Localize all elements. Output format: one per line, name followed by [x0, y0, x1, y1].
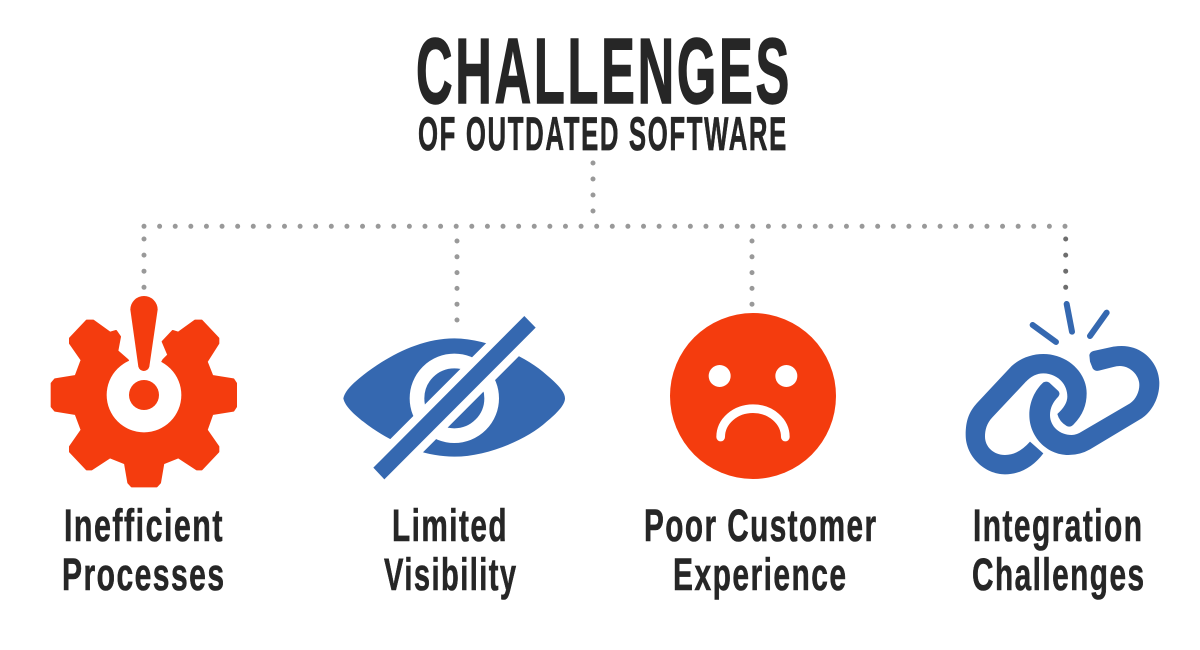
label: poor customer experience [644, 500, 878, 600]
label: inefficient processes: Processes [62, 549, 226, 600]
label: limited visibility: Visibility [384, 549, 518, 600]
label: inefficient processes [62, 500, 226, 600]
icon: broken chain link [966, 304, 1159, 474]
title [416, 19, 792, 160]
label: poor customer experience: Poor Customer [644, 500, 878, 551]
label: limited visibility [384, 500, 518, 600]
subtitle line: of outdated software: OF OUTDATED SOFTWARE [418, 107, 788, 160]
icon: sad face [670, 313, 836, 479]
label: inefficient processes: Inefficient [64, 500, 224, 551]
label: limited visibility: Limited [392, 500, 508, 551]
icon: crossed-out eye [343, 309, 565, 486]
label: poor customer experience: Experience [673, 549, 848, 600]
dotted connector tree [144, 163, 1067, 321]
icon: gear with exclamation mark [52, 296, 236, 486]
label: integration challenges [972, 500, 1146, 600]
title line: challenges: CHALLENGES [416, 19, 792, 123]
